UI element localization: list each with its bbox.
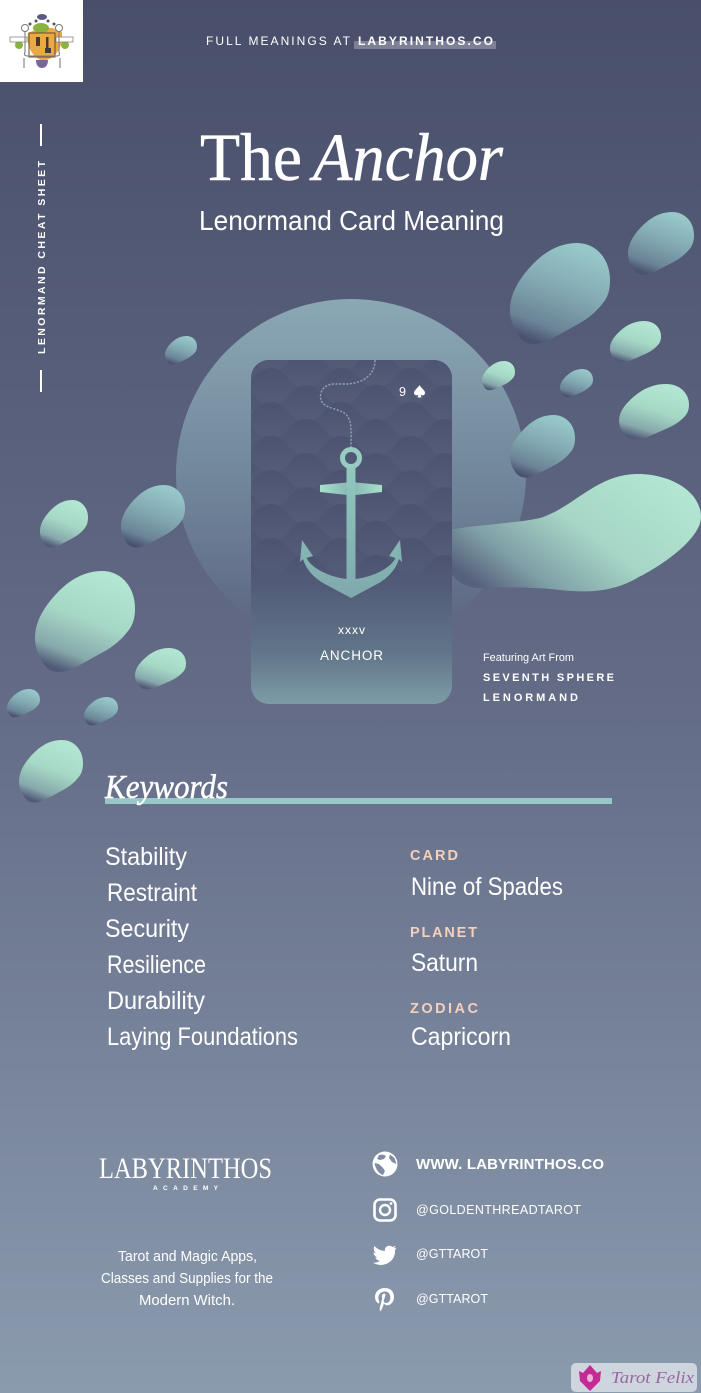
icon: pinterest [375,1288,394,1312]
large background circle [176,299,526,649]
title [200,119,504,195]
tagline: Modern Witch. [139,1292,235,1309]
keywords heading: Keywords [104,769,228,806]
planet attribute: Saturn [411,949,478,977]
keywords heading [104,769,612,806]
website link: WWW. LABYRINTHOS.CO [416,1156,604,1173]
Tarot Felix watermark [571,1363,697,1392]
header link line: FULL MEANINGS AT [206,34,351,48]
large mint wave blob [440,474,701,591]
card pip: nine of spades [399,384,425,399]
card attribute: CARD [410,848,458,864]
keywords list: Restraint [107,879,197,907]
keywords list: Durability [107,987,205,1015]
logo crest badge [0,0,83,82]
Labyrinthos academy logo: LABYRINTHOS [99,1152,272,1185]
instagram handle: @GOLDENTHREADTAROT [416,1203,581,1217]
art credit: LENORMAND [483,692,578,704]
Labyrinthos academy logo [99,1152,272,1192]
twitter handle: @GTTAROT [416,1247,488,1261]
side label: cheat sheet: LENORMAND CHEAT SHEET [36,160,48,354]
keywords list: Security [105,915,189,943]
tagline [101,1248,273,1309]
planet attribute: PLANET [410,925,477,941]
subtitle: Lenormand Card Meaning [199,205,504,236]
card pip: nine of spades: 9 [399,384,406,399]
art credit [483,652,614,704]
tagline: Classes and Supplies for the [101,1270,273,1287]
keywords list: Stability [105,843,187,871]
card attribute: Nine of Spades [411,873,563,901]
tagline: Tarot and Magic Apps, [118,1248,257,1265]
pinterest handle: @GTTAROT [416,1292,488,1306]
zodiac attribute [410,1001,511,1051]
header link line [206,34,496,49]
floating blobs [7,212,694,803]
card name: ANCHOR [320,648,383,663]
Tarot Felix watermark: Tarot Felix [611,1368,694,1387]
title: The [200,119,302,195]
title: Anchor [309,119,504,195]
icon: twitter [373,1246,396,1265]
Labyrinthos academy logo: ACADEMY [153,1185,219,1192]
icon: globe [372,1152,398,1176]
card [251,360,452,704]
dashed anchor rope [320,360,375,448]
planet attribute [410,925,478,977]
keywords list: Laying Foundations [107,1023,298,1051]
icon: instagram [374,1200,396,1220]
keywords list [105,843,298,1051]
art credit: SEVENTH SPHERE [483,672,614,684]
keywords list: Resilience [107,951,206,979]
anchor icon [300,450,402,598]
zodiac attribute: Capricorn [411,1023,511,1051]
zodiac attribute: ZODIAC [410,1001,479,1017]
art credit: Featuring Art From [483,652,574,664]
card scale pattern [251,360,452,377]
card numeral: xxxv [338,623,365,637]
header link line: LABYRINTHOS.CO [358,34,493,48]
card attribute [410,848,563,901]
